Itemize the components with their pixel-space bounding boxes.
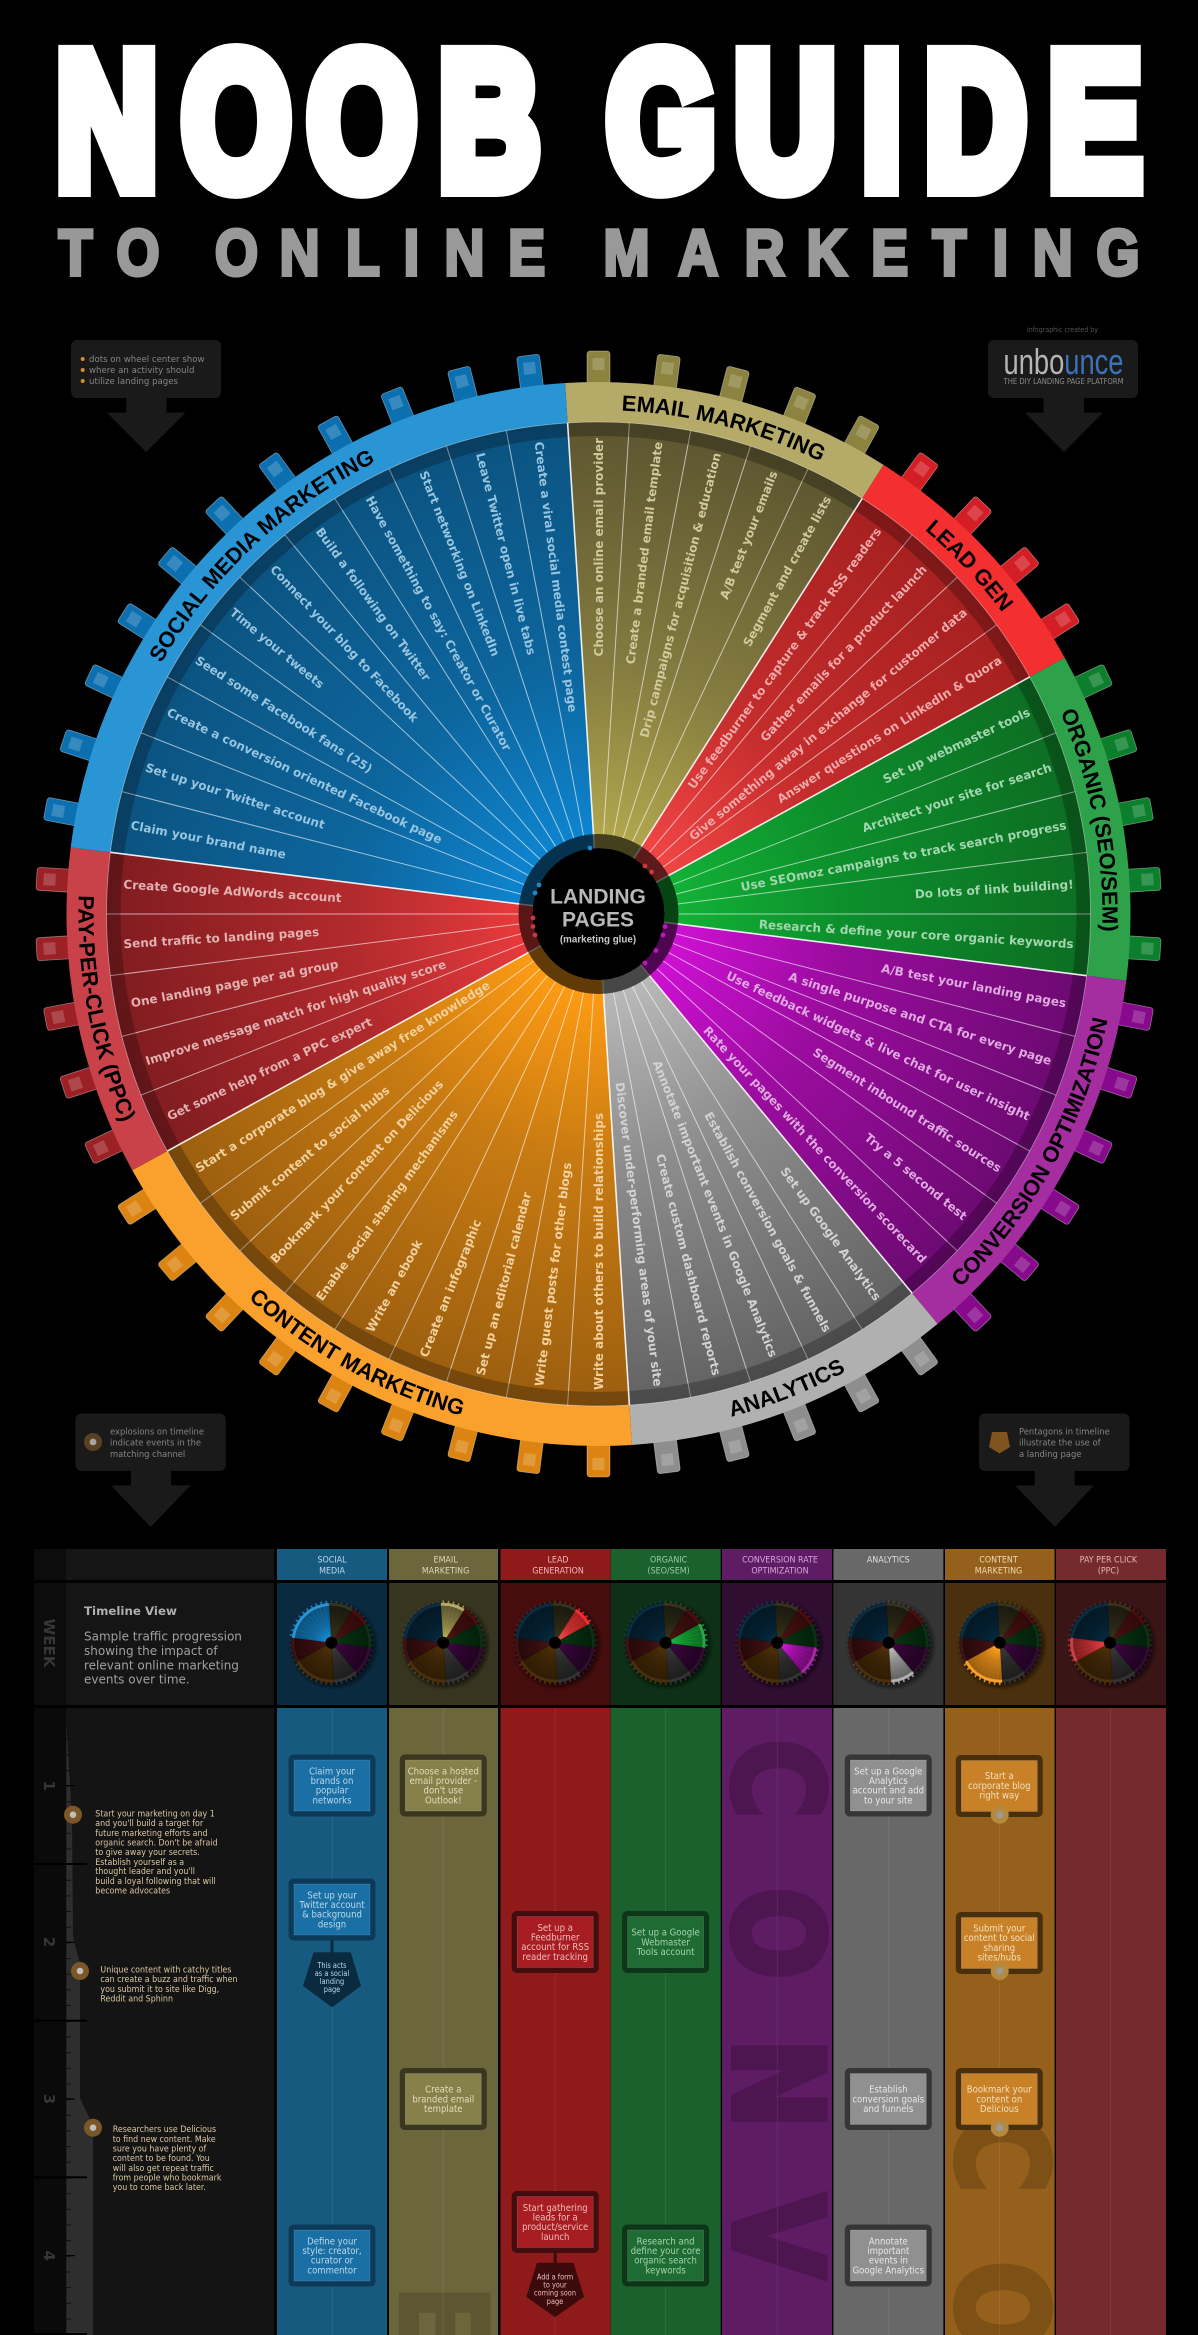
card: define your style: commentor xyxy=(307,2266,357,2277)
column: conversion rate optimization: O xyxy=(704,1887,849,1980)
segment: conversion optimization: Rate your pages with the conversion scorecard xyxy=(700,1024,929,1266)
column: pay per click: (PPC) xyxy=(1098,1566,1119,1577)
column: lead generation: LEAD xyxy=(547,1555,569,1566)
column: content marketing: C xyxy=(928,2113,1073,2193)
mini wheel: analytics xyxy=(845,1599,937,1691)
card: gathering leads: leads for a xyxy=(533,2213,578,2224)
card: webmaster tools: Set up a Google xyxy=(631,1928,700,1939)
segment: social media marketing: Seed some Facebook fans (25) xyxy=(193,653,375,776)
segment: social media marketing: Build a following on Twitter xyxy=(313,525,433,684)
card: conversion goals: Establish xyxy=(869,2085,908,2096)
column: pay per click xyxy=(1056,1549,1166,2335)
segment: organic: Do lots of link building! xyxy=(914,877,1074,901)
card: claim your brands: brands on xyxy=(311,1777,354,1787)
card: twitter account xyxy=(288,1878,376,1940)
title: NOOB GUIDE xyxy=(56,13,1142,228)
callout: explosions legend: indicate events in the xyxy=(110,1438,201,1448)
segment: content marketing: CONTENT MARKETING xyxy=(252,1290,464,1414)
card: feedburner: Set up a xyxy=(537,1923,573,1934)
callout: pentagons legend xyxy=(979,1414,1130,1527)
callout: pentagons legend: Pentagons in timeline xyxy=(1019,1426,1110,1436)
column: organic: (SEO/SEM) xyxy=(648,1566,690,1577)
event marker: note 3: to find new content. Make xyxy=(113,2133,216,2144)
event marker: note 1: future marketing efforts and xyxy=(95,1827,208,1838)
panel: timeline intro: events over time. xyxy=(84,1673,190,1687)
segment: conversion optimization: CONVERSION OPTIMIZATION xyxy=(952,1018,1108,1284)
pentagon: coming soon page: to your xyxy=(543,2280,567,2290)
segment: content marketing: Set up an editorial calendar xyxy=(474,1191,534,1377)
segment: social media marketing: Leave Twitter open in live tabs xyxy=(473,451,538,656)
card: gathering leads: product/service xyxy=(522,2223,589,2233)
segment: content marketing xyxy=(118,946,632,1478)
card: hosted email provider xyxy=(400,1754,487,1816)
segment: lead gen: Use feedburner to capture & track RSS readers xyxy=(685,525,884,792)
segment: conversion optimization: Try a 5 second test xyxy=(862,1130,970,1223)
card: annotate events: important xyxy=(867,2247,910,2257)
segment: analytics xyxy=(603,965,938,1474)
segment: email marketing: A/B test your emails xyxy=(717,469,781,601)
card: google analytics account: to your site xyxy=(864,1796,913,1807)
segment: email marketing: EMAIL MARKETING xyxy=(622,396,824,460)
segment: email marketing xyxy=(565,350,884,858)
card: social sharing sites: sites/hubs xyxy=(978,1953,1021,1964)
panel: timeline intro: Timeline View xyxy=(84,1604,177,1618)
segment: analytics: Create custom dashboard reports xyxy=(653,1152,723,1377)
callout: dots legend xyxy=(71,340,221,452)
column: email marketing: MARKETING xyxy=(422,1566,469,1577)
event marker: note 2: can create a buzz and traffic when xyxy=(100,1974,237,1984)
card: conversion goals: conversion goals xyxy=(852,2095,924,2106)
hub: landing pages: LANDING xyxy=(550,885,646,908)
panel: timeline intro: Sample traffic progression xyxy=(84,1630,242,1644)
event marker: note 3: from people who bookmark xyxy=(113,2172,222,2183)
segment: content marketing: Enable social sharing mechanisms xyxy=(313,1108,461,1303)
column: analytics: ANALYTICS xyxy=(867,1555,910,1566)
column: conversion rate optimization: C xyxy=(704,1739,849,1819)
card: corporate blog: right way xyxy=(979,1791,1020,1802)
panel: timeline intro: showing the impact of xyxy=(84,1644,218,1658)
card: organic keywords: organic search xyxy=(634,2256,697,2267)
column: conversion rate optimization: OPTIMIZATION xyxy=(751,1566,809,1577)
card: google analytics account: account and add xyxy=(853,1786,924,1797)
segment: conversion optimization: A/B test your landing pages xyxy=(880,961,1067,1010)
pentagon: coming soon page: coming soon xyxy=(534,2288,576,2298)
panel: traffic timeline chart: 2 xyxy=(40,1937,58,1947)
column: social media: MEDIA xyxy=(319,1566,345,1577)
panel: timeline intro: relevant online marketing xyxy=(84,1658,239,1672)
logo: unbounce credit: THE DIY LANDING PAGE PLATFORM xyxy=(1003,377,1124,386)
panel: traffic timeline chart: 4 xyxy=(40,2250,58,2261)
column: organic xyxy=(611,1549,721,2335)
event marker: note 1 xyxy=(64,1806,218,1896)
event marker: note 1: to give away your secrets. xyxy=(95,1847,200,1857)
segment: content marketing: Create an infographic xyxy=(417,1218,484,1359)
card: feedburner: Feedburner xyxy=(531,1933,580,1944)
mini wheel: email xyxy=(400,1599,491,1691)
card: webmaster tools xyxy=(622,1911,709,1973)
panel: traffic timeline chart xyxy=(34,1708,274,2335)
panel: traffic timeline chart: 1 xyxy=(40,1780,58,1791)
event marker: note 1: organic search. Don't be afraid xyxy=(95,1837,218,1848)
card: hosted email provider: email provider - xyxy=(410,1777,477,1787)
segment: organic: Set up webmaster tools xyxy=(881,705,1032,786)
card: feedburner xyxy=(512,1911,599,1973)
card: twitter account: Set up your xyxy=(307,1891,357,1902)
card: define your style: style: creator, xyxy=(302,2247,362,2257)
callout: explosions legend xyxy=(75,1414,226,1527)
segment: content marketing: Start a corporate blog & give away free knowledge xyxy=(193,978,493,1175)
mini wheel: organic xyxy=(622,1599,713,1691)
callout: explosions legend: matching channel xyxy=(110,1449,185,1459)
pentagon: social landing page: landing xyxy=(320,1977,344,1986)
column: email marketing: EMAIL xyxy=(434,1555,458,1566)
segment: social media marketing: Time your tweets xyxy=(227,605,327,691)
segment: pay-per-click: Send traffic to landing pages xyxy=(123,925,320,951)
event marker: note 1: build a loyal following that will xyxy=(95,1875,216,1886)
card: hosted email provider: don't use xyxy=(424,1786,463,1797)
segment: lead gen: Answer questions on LinkedIn & Quora xyxy=(775,653,1004,806)
card: google analytics account xyxy=(845,1754,932,1816)
callout: pentagons legend: a landing page xyxy=(1019,1449,1081,1459)
card: hosted email provider: Choose a hosted xyxy=(408,1767,479,1778)
event marker: note 1: thought leader and you'll xyxy=(95,1866,195,1876)
event marker: note 3: content to be found. You xyxy=(113,2153,210,2163)
card: define your style: Define your xyxy=(307,2237,357,2248)
hub: landing pages xyxy=(526,841,672,987)
card: claim your brands: Claim your xyxy=(309,1767,355,1778)
segment: organic: Research & define your core organic keywords xyxy=(758,917,1074,951)
card: organic keywords: define your core xyxy=(631,2247,701,2257)
pentagon: social landing page: page xyxy=(324,1985,340,1994)
segment: social media marketing: SOCIAL MEDIA MARKETING xyxy=(150,450,374,661)
wheel overlay bands xyxy=(106,422,1090,1406)
card: webmaster tools: Webmaster xyxy=(641,1938,690,1949)
card: twitter account: & background xyxy=(302,1910,362,1921)
hub: landing pages: PAGES xyxy=(562,909,634,932)
segment: organic: ORGANIC (SEO/SEM) xyxy=(1062,709,1118,931)
segment: social media marketing: Set up your Twitter account xyxy=(144,761,327,832)
event marker: note 3: Researchers use Delicious xyxy=(113,2124,216,2134)
card: organic keywords: keywords xyxy=(645,2266,686,2277)
event marker: note 1: Start your marketing on day 1 xyxy=(95,1808,215,1819)
segment: social media marketing: Create a viral social media contest page xyxy=(532,441,580,713)
segment: pay-per-click: Get some help from a PPC expert xyxy=(165,1015,375,1123)
card: google analytics account: Set up a Google xyxy=(854,1767,923,1778)
callout: dots legend: utilize landing pages xyxy=(89,377,179,387)
callout: dots legend: dots on wheel center show xyxy=(89,355,204,365)
segment: content marketing: Submit content to social hubs xyxy=(227,1083,392,1223)
callout: dots legend: where an activity should xyxy=(89,366,194,376)
segment: pay-per-click: Improve message match for high quality score xyxy=(144,957,448,1068)
logo: unbounce credit: unbounce xyxy=(1004,341,1124,382)
segment: social media marketing xyxy=(44,354,594,905)
card: annotate events: events in xyxy=(869,2256,908,2267)
card: feedburner: account for RSS xyxy=(521,1943,589,1953)
segment: social media marketing: Claim your brand name xyxy=(130,818,287,862)
event marker: note 3: you to come back later. xyxy=(113,2182,206,2192)
segment: email marketing: Choose an online email provider xyxy=(592,438,606,656)
segment: analytics: Annotate important events in Google Analytics xyxy=(650,1058,780,1359)
card: bookmark on delicious: Bookmark your xyxy=(967,2085,1032,2096)
card: corporate blog: corporate blog xyxy=(968,1781,1031,1792)
card: corporate blog xyxy=(956,1755,1043,1824)
column: email marketing xyxy=(375,1549,513,2335)
card: annotate events: Annotate xyxy=(869,2237,908,2248)
card: branded email template: Create a xyxy=(425,2085,461,2096)
segment: pay-per-click: One landing page per ad group xyxy=(130,957,340,1010)
card: branded email template: template xyxy=(424,2105,463,2115)
card: google analytics account: Analytics xyxy=(869,1777,908,1787)
card: branded email template: branded email xyxy=(412,2095,474,2106)
segment: lead gen: Gather emails for a product launch xyxy=(758,562,930,744)
event marker: note 3 xyxy=(84,2119,222,2192)
marketing wheel xyxy=(36,350,1162,1478)
logo: unbounce credit: infographic created by xyxy=(1027,326,1098,334)
column: lead generation xyxy=(500,1549,610,2335)
subtitle: TO ONLINE MARKETING xyxy=(59,216,1139,289)
callout: pentagons legend: illustrate the use of xyxy=(1019,1438,1102,1448)
column: content marketing: MARKETING xyxy=(975,1566,1022,1577)
segment: social media marketing: Start networking on LinkedIn xyxy=(416,469,502,658)
column: organic: ORGANIC xyxy=(650,1555,687,1566)
card: conversion goals: and funnels xyxy=(863,2105,914,2115)
card: bookmark on delicious xyxy=(956,2068,1043,2137)
segment: organic: Architect your site for search xyxy=(860,761,1053,835)
segment: content marketing: Bookmark your content on Delicious xyxy=(268,1077,446,1266)
hub: landing pages: (marketing glue) xyxy=(560,935,636,946)
segment: analytics: Set up Google Analytics xyxy=(778,1165,884,1303)
event marker: note 2: you submit it to site like Digg, xyxy=(100,1983,219,1994)
column: conversion rate optimization: V xyxy=(704,2194,849,2278)
segment: content marketing: Write about others to build relationships xyxy=(592,1113,606,1390)
segment: social media marketing: Connect your blog to Facebook xyxy=(267,562,422,726)
column: lead generation: GENERATION xyxy=(532,1566,584,1577)
card: branded email template xyxy=(400,2068,487,2130)
column: social media: SOCIAL xyxy=(317,1555,347,1566)
pentagon: social landing page: This acts xyxy=(316,1961,347,1970)
column: pay per click: PAY PER CLICK xyxy=(1080,1555,1138,1566)
pentagon: coming soon page xyxy=(526,2252,584,2317)
segment: lead gen xyxy=(634,452,1080,882)
card: gathering leads: Start gathering xyxy=(523,2203,588,2214)
card: bookmark on delicious: Delicious xyxy=(980,2105,1019,2115)
mini wheel: ppc xyxy=(1067,1599,1158,1691)
mini wheel: lead xyxy=(512,1599,603,1691)
card: organic keywords xyxy=(622,2224,709,2286)
card: conversion goals xyxy=(845,2068,932,2130)
segment: analytics: Discover under-performing areas of your site xyxy=(613,1081,665,1387)
pentagon: coming soon page: Add a form xyxy=(537,2272,573,2282)
card: gathering leads: launch xyxy=(541,2232,570,2243)
card: annotate events: Google Analytics xyxy=(853,2266,924,2277)
card: social sharing sites: sharing xyxy=(983,1943,1015,1954)
card: claim your brands xyxy=(288,1754,376,1816)
card: claim your brands: popular xyxy=(316,1786,348,1797)
column: conversion rate optimization: N xyxy=(704,2038,849,2129)
mini wheel: social xyxy=(288,1599,379,1691)
card: social sharing sites: content to social xyxy=(964,1934,1035,1944)
card: hosted email provider: Outlook! xyxy=(425,1796,462,1807)
event marker: note 1: become advocates xyxy=(95,1885,170,1896)
card: bookmark on delicious: content on xyxy=(976,2095,1022,2106)
pentagon: coming soon page: page xyxy=(547,2297,563,2306)
event marker: note 1: Establish yourself as a xyxy=(95,1856,184,1867)
segment: pay-per-click: Create Google AdWords account xyxy=(123,877,342,905)
card: define your style: curator or xyxy=(311,2256,353,2267)
column: analytics xyxy=(833,1549,943,2335)
panel: traffic timeline chart: 3 xyxy=(40,2094,58,2104)
column: conversion rate optimization: CONVERSION RATE xyxy=(742,1555,818,1566)
panel: timeline intro: WEEK xyxy=(40,1619,58,1669)
segment: lead gen: Give something away in exchange for customer data xyxy=(686,605,970,843)
card: social sharing sites: Submit your xyxy=(973,1924,1026,1935)
column: conversion rate optimization xyxy=(704,1549,849,2335)
segment: conversion optimization xyxy=(641,923,1154,1332)
card: annotate events xyxy=(845,2224,932,2286)
event marker: note 3: sure you have plenty of xyxy=(113,2143,207,2154)
pentagon: social landing page: as a social xyxy=(315,1969,349,1978)
segment: analytics: Establish conversion goals & funnels xyxy=(701,1110,834,1335)
segment: email marketing: Drip campaigns for acquisition & education xyxy=(637,451,724,739)
segment: organic: Use SEOmoz campaigns to track search progress xyxy=(740,818,1067,894)
logo: unbounce credit xyxy=(988,326,1138,452)
segment: content marketing: Write an ebook xyxy=(363,1237,426,1335)
segment: analytics: ANALYTICS xyxy=(732,1360,844,1417)
segment: conversion optimization: Segment inbound traffic sources xyxy=(810,1045,1004,1175)
segment: social media marketing: Have something to say: Creator or Curator xyxy=(363,494,514,753)
callout: explosions legend: explosions on timeline xyxy=(110,1426,204,1436)
segment: social media marketing: Create a conversion oriented Facebook page xyxy=(165,705,444,847)
segment: pay-per-click: PAY-PER-CLICK (PPC) xyxy=(78,896,136,1122)
card: social sharing sites xyxy=(956,1912,1043,1980)
segment: lead gen: LEAD GEN xyxy=(926,519,1014,612)
event marker: note 2: Reddit and Sphinn xyxy=(100,1993,173,2004)
event marker: note 3: will also get repeat traffic xyxy=(113,2162,214,2173)
card: organic keywords: Research and xyxy=(637,2237,695,2248)
segment: pay-per-click xyxy=(36,847,540,1170)
card: twitter account: Twitter account xyxy=(298,1901,365,1911)
segment: email marketing: Create a branded email template xyxy=(623,441,665,665)
segment: content marketing: Write guest posts for other blogs xyxy=(532,1162,574,1387)
segment: organic xyxy=(656,658,1162,981)
mini wheel: conversion xyxy=(734,1599,825,1691)
segment: email marketing: Segment and create lists xyxy=(740,494,834,649)
pentagon: social landing page xyxy=(303,1940,361,2007)
card: feedburner: reader tracking xyxy=(522,1952,588,1963)
column: content marketing xyxy=(928,1549,1073,2335)
card: twitter account: design xyxy=(318,1920,346,1931)
panel: timeline intro xyxy=(34,1549,274,1705)
column: content marketing: CONTENT xyxy=(979,1555,1018,1566)
card: gathering leads xyxy=(512,2191,599,2253)
mini wheel: content xyxy=(956,1599,1048,1691)
event marker: note 2: Unique content with catchy titles xyxy=(100,1964,231,1975)
event marker: note 2 xyxy=(71,1962,237,2004)
event marker: note 1: and you'll build a target for xyxy=(95,1818,204,1828)
card: define your style xyxy=(288,2224,376,2286)
column: social media xyxy=(277,1549,387,2335)
card: webmaster tools: Tools account xyxy=(636,1948,695,1958)
card: corporate blog: Start a xyxy=(985,1772,1014,1782)
segment: conversion optimization: A single purpose and CTA for every page xyxy=(787,970,1053,1068)
card: claim your brands: networks xyxy=(312,1796,352,1807)
segment: conversion optimization: Use feedback widgets & live chat for user insight xyxy=(724,968,1032,1123)
